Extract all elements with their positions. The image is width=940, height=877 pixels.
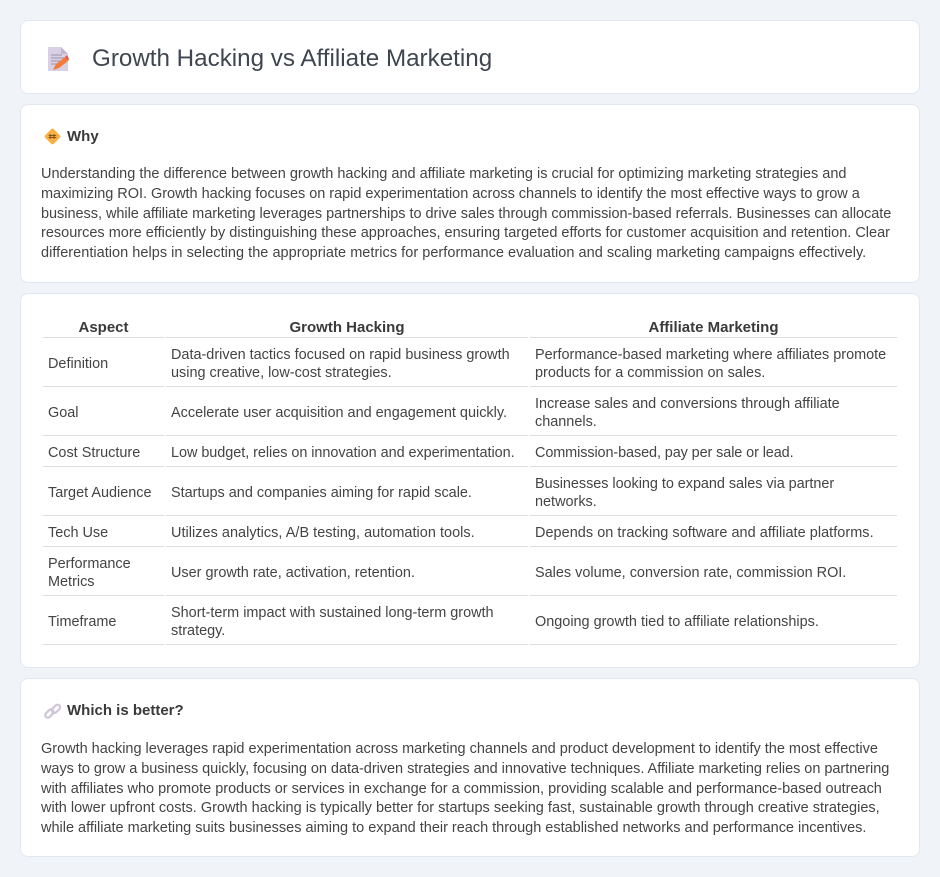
text: why paragraph — [41, 166, 891, 261]
icon: link — [44, 704, 61, 719]
panel: why — [20, 104, 920, 283]
text: which is better paragraph — [41, 741, 889, 836]
row: timeframe — [43, 605, 897, 645]
row: target audience: networks. — [535, 494, 597, 510]
table header: Growth Hacking — [289, 319, 404, 336]
row: goal: Accelerate user acquisition and engagement quickly. — [171, 405, 507, 421]
row: cost structure: Cost Structure — [48, 445, 140, 461]
row: definition: Performance-based marketing where affiliates promote — [535, 347, 886, 363]
text: which is better paragraph: Growth hacking leverages rapid experimentation across marketing channels and product development to identify the most effective — [41, 741, 878, 757]
text: which is better paragraph: ways to grow a business quickly, focusing on data-driven strategies and innovative techniques. Affiliate marketing relies on partnering — [41, 761, 889, 777]
row: performance metrics: Metrics — [48, 574, 95, 590]
text: why paragraph: differentiation helps in selecting the appropriate metrics for performance evaluation and scaling marketing campaigns effectively. — [41, 245, 866, 261]
row: definition: products for a commission on sales. — [535, 365, 765, 381]
row: goal — [43, 396, 897, 436]
row: definition — [43, 347, 897, 387]
row: goal: Increase sales and conversions through affiliate — [535, 396, 840, 412]
row: target audience: Target Audience — [48, 485, 152, 501]
text: which is better paragraph: while affiliate marketing suits businesses aiming to expand their reach through established networks and performance incentives. — [41, 820, 866, 836]
heading: why: Why — [67, 128, 99, 145]
panel: comparison table — [20, 293, 920, 668]
icon: document with pencil — [48, 47, 69, 71]
panel: which is better — [20, 678, 920, 857]
row: tech use: Utilizes analytics, A/B testing, automation tools. — [171, 525, 475, 541]
row: cost structure: Commission-based, pay per sale or lead. — [535, 445, 794, 461]
row: performance metrics — [43, 556, 897, 596]
row: timeframe: strategy. — [171, 623, 225, 639]
row: cost structure: Low budget, relies on innovation and experimentation. — [171, 445, 515, 461]
table header: Affiliate Marketing — [648, 319, 779, 336]
row: timeframe: Ongoing growth tied to affiliate relationships. — [535, 614, 819, 630]
row: performance metrics: User growth rate, activation, retention. — [171, 565, 415, 581]
row: performance metrics: Performance — [48, 556, 131, 572]
row: definition: Definition — [48, 356, 108, 372]
row: cost structure — [43, 445, 897, 467]
row: performance metrics: Sales volume, conversion rate, commission ROI. — [535, 565, 846, 581]
row: target audience — [43, 476, 897, 516]
text: why paragraph: business, while affiliate marketing leverages partnerships to drive sales through commission-based referrals. Businesses can allocate — [41, 206, 891, 222]
row: tech use: Tech Use — [48, 525, 108, 541]
text: why paragraph: Understanding the difference between growth hacking and affiliate marketing is crucial for optimizing marketing strategies and — [41, 166, 846, 182]
row: target audience: Businesses looking to expand sales via partner — [535, 476, 834, 492]
row: timeframe: Short-term impact with sustained long-term growth — [171, 605, 494, 621]
row: timeframe: Timeframe — [48, 614, 116, 630]
row: tech use: Depends on tracking software and affiliate platforms. — [535, 525, 874, 541]
icon: warning diamond — [44, 128, 60, 144]
text: why paragraph: resources more efficiently by distinguishing these approaches, ensuring targeted efforts for customer acquisition and retention. Clear — [41, 225, 890, 241]
text: which is better paragraph: with lower upfront costs. Growth hacking is typically better for startups seeking fast, sustainable growth through creative strategies, — [41, 800, 880, 816]
row: goal: channels. — [535, 414, 597, 430]
table header: Aspect — [78, 319, 129, 336]
table header — [43, 319, 897, 338]
row: definition: Data-driven tactics focused on rapid business growth — [171, 347, 510, 363]
heading: which is better: Which is better? — [67, 702, 184, 719]
row: tech use — [43, 525, 897, 547]
row: goal: Goal — [48, 405, 78, 421]
text: why paragraph: maximizing ROI. Growth hacking focuses on rapid experimentation across channels to identify the most effective ways to grow a — [41, 186, 860, 202]
text: which is better paragraph: with affiliates who promote products or services in exchange for a commission, providing scalable and performance-based outreach — [41, 781, 882, 797]
title: Growth Hacking vs Affiliate Marketing — [92, 45, 492, 72]
header card — [20, 20, 920, 94]
row: definition: using creative, low-cost strategies. — [171, 365, 392, 381]
row: target audience: Startups and companies aiming for rapid scale. — [171, 485, 472, 501]
